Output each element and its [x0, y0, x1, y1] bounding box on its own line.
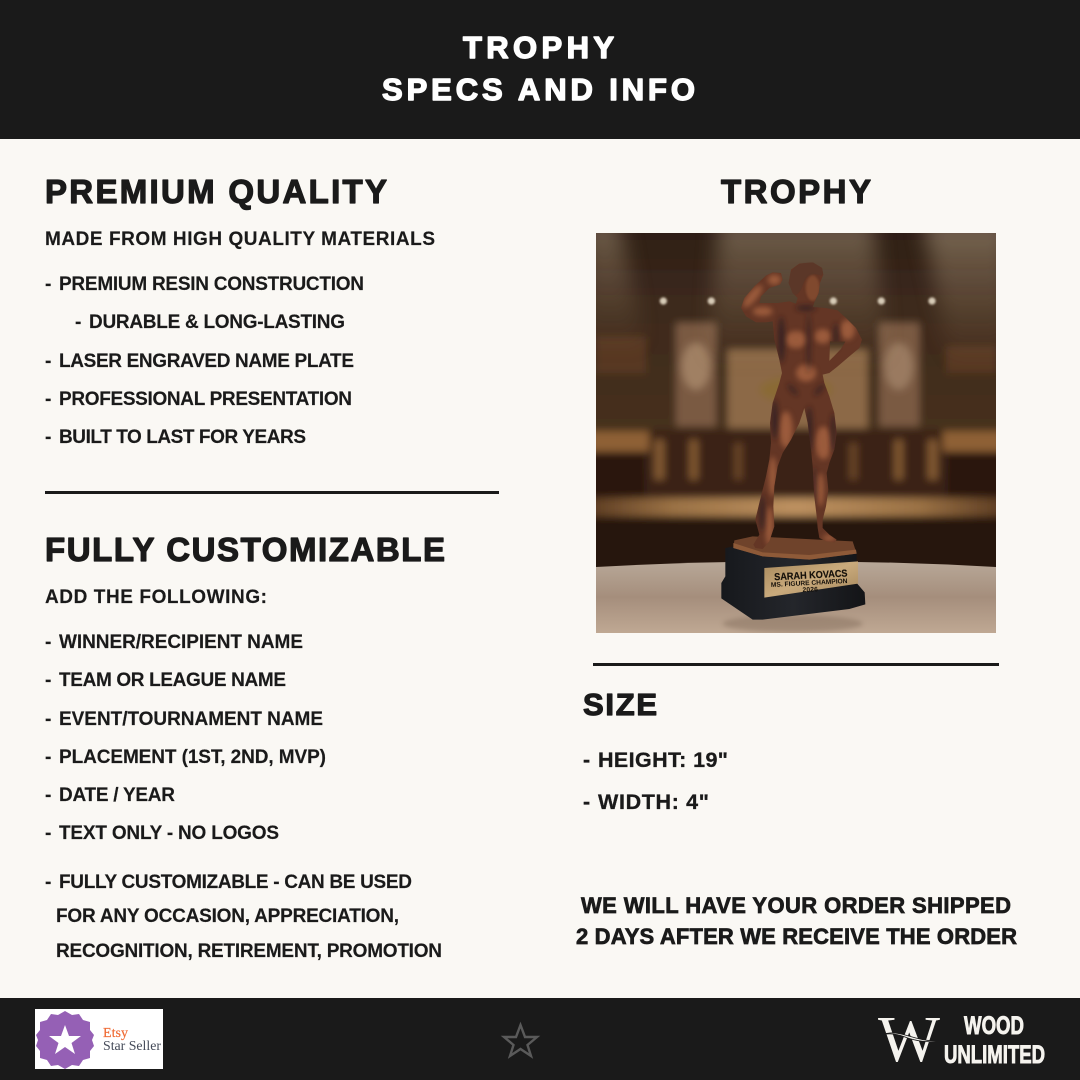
- star seller label: Star Seller: [103, 1039, 161, 1054]
- name plate: [764, 561, 858, 598]
- occasions note: FOR ANY OCCASION, APPRECIATION,: [56, 906, 399, 927]
- occasions note: RECOGNITION, RETIREMENT, PROMOTION: [56, 941, 442, 962]
- trophy photo: [596, 233, 996, 633]
- quality list: -: [45, 351, 51, 372]
- name plate: SARAH KOVACS: [774, 568, 848, 583]
- panel: size: WIDTH: 4": [598, 790, 709, 814]
- customization list: -: [45, 632, 51, 653]
- quality list: -: [45, 389, 51, 410]
- table reflection: [723, 615, 863, 632]
- title: SPECS AND INFO: [382, 72, 695, 107]
- panel: size: HEIGHT: 19": [598, 748, 728, 772]
- occasions note: FULLY CUSTOMIZABLE - CAN BE USED: [59, 872, 412, 893]
- ceiling lights: [660, 297, 936, 305]
- name plate: 2026: [802, 586, 818, 594]
- shipping note: WE WILL HAVE YOUR ORDER SHIPPED: [581, 893, 1011, 918]
- dimension: height: -: [583, 748, 590, 772]
- quality list: LASER ENGRAVED NAME PLATE: [59, 351, 354, 372]
- shipping note: 2 DAYS AFTER WE RECEIVE THE ORDER: [576, 924, 1017, 949]
- customization list: -: [45, 823, 51, 844]
- etsy star seller badge: [35, 1009, 163, 1069]
- wood unlimited logo: [878, 1003, 1045, 1076]
- logo wordmark: WOOD: [964, 1012, 1024, 1040]
- occasions note: -: [45, 872, 51, 893]
- intro text: add the following: ADD THE FOLLOWING:: [45, 587, 267, 608]
- customization list: TEAM OR LEAGUE NAME: [59, 670, 286, 691]
- quality list: PREMIUM RESIN CONSTRUCTION: [59, 274, 364, 295]
- customization list: -: [45, 670, 51, 691]
- footer band: [0, 998, 1080, 1080]
- header band: [0, 0, 1080, 139]
- customization list: EVENT/TOURNAMENT NAME: [59, 709, 323, 730]
- customization list: PLACEMENT (1ST, 2ND, MVP): [59, 747, 326, 768]
- panel: premium quality: [45, 173, 435, 448]
- customization list: [45, 632, 326, 844]
- stage light beams: [596, 233, 996, 342]
- heading: trophy: TROPHY: [721, 173, 871, 210]
- etsy label: Etsy: [103, 1026, 128, 1041]
- quality list: -: [45, 274, 51, 295]
- shipping note: [576, 893, 1017, 949]
- heading: size: SIZE: [583, 687, 657, 722]
- panel: size: [583, 687, 728, 814]
- customization list: DATE / YEAR: [59, 785, 175, 806]
- title: [382, 30, 695, 107]
- muscle shadows: [759, 305, 838, 531]
- blurred concert hall backdrop: [596, 233, 996, 567]
- quality list: [45, 274, 364, 448]
- customization list: -: [45, 709, 51, 730]
- quality list: PROFESSIONAL PRESENTATION: [59, 389, 352, 410]
- icon: purple scalloped badge: [36, 1011, 94, 1069]
- muscle highlights: [740, 274, 855, 546]
- intro text: materials: MADE FROM HIGH QUALITY MATERIALS: [45, 229, 435, 250]
- title: TROPHY: [463, 30, 614, 65]
- quality list: BUILT TO LAST FOR YEARS: [59, 427, 306, 448]
- heading: fully customizable: FULLY CUSTOMIZABLE: [45, 531, 445, 568]
- panel: fully customizable: [45, 531, 445, 962]
- name plate: MS. FIGURE CHAMPION: [771, 578, 848, 589]
- customization list: WINNER/RECIPIENT NAME: [59, 632, 303, 653]
- dimension: width: -: [583, 790, 590, 814]
- quality list: DURABLE & LONG-LASTING: [89, 312, 345, 333]
- occasions note: [45, 872, 442, 962]
- trophy base: [721, 536, 865, 620]
- icon: serif W with swoosh: W: [878, 1003, 941, 1076]
- customization list: -: [45, 785, 51, 806]
- customization list: TEXT ONLY - NO LOGOS: [59, 823, 279, 844]
- quality list: -: [75, 312, 81, 333]
- table top: [596, 561, 996, 633]
- customization list: -: [45, 747, 51, 768]
- heading: premium quality: PREMIUM QUALITY: [45, 173, 387, 210]
- hair and face: [789, 262, 822, 294]
- icon: outline star: [504, 1025, 537, 1056]
- logo wordmark: [944, 1012, 1045, 1069]
- bronze figure: [741, 262, 862, 549]
- logo wordmark: UNLIMITED: [944, 1041, 1045, 1069]
- quality list: -: [45, 427, 51, 448]
